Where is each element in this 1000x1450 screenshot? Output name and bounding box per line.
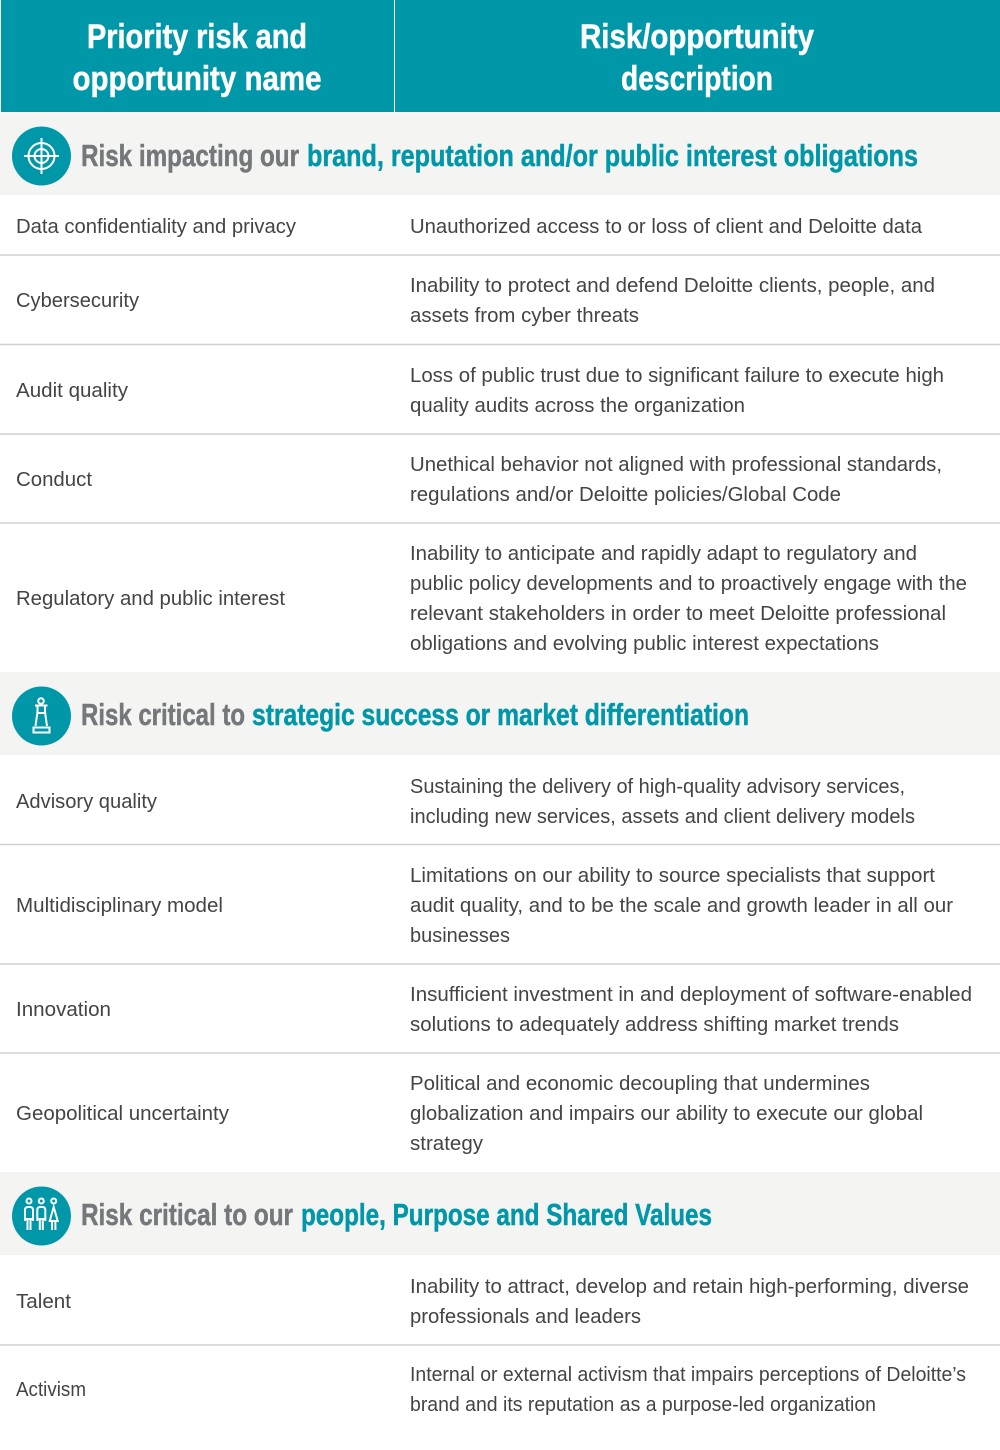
row: cybersecurity: Cybersecurity [16,289,140,312]
icon: three people [12,1186,71,1246]
row: talent: Talent [16,1290,71,1313]
row: cybersecurity [16,274,935,327]
section heading: Risk impacting our [81,138,299,173]
row: talent: professionals and leaders [410,1305,641,1328]
row: regulatory and public interest: Inability to anticipate and rapidly adapt to regulatory and [410,542,917,565]
row: data confidentiality: Data confidentiality and privacy [16,215,297,238]
row: data confidentiality [16,215,923,238]
row: innovation [16,983,972,1036]
section heading: Risk critical to [81,697,245,732]
row: audit quality: Loss of public trust due to significant failure to execute high [410,364,944,387]
row: innovation: Innovation [16,998,111,1021]
row: talent [16,1275,969,1328]
row: conduct: Conduct [16,468,92,491]
row: advisory quality [16,775,915,828]
row: conduct: regulations and/or Deloitte policies/Global Code [410,483,841,506]
section heading: people, Purpose and Shared Values [301,1197,712,1232]
header: risk/opportunity description: Risk/opportunity [580,18,814,56]
row: conduct: Unethical behavior not aligned with professional standards, [410,453,942,476]
row: regulatory and public interest: obligations and evolving public interest expectations [410,632,879,655]
row: geopolitical uncertainty: Political and economic decoupling that undermines [410,1072,870,1095]
table header [1,0,1000,112]
row: geopolitical uncertainty: Geopolitical uncertainty [16,1102,230,1125]
section heading [81,697,749,732]
row: audit quality: Audit quality [16,379,129,402]
row: activism: Activism [16,1378,86,1401]
row: cybersecurity: Inability to protect and defend Deloitte clients, people, and [410,274,935,297]
row: multidisciplinary model: audit quality, and to be the scale and growth leader in all our [410,894,953,917]
row: conduct [16,453,942,506]
section heading [81,1197,712,1232]
row: audit quality: quality audits across the organization [410,394,745,417]
icon: chess piece [12,686,71,746]
row: regulatory and public interest: Regulatory and public interest [16,587,285,610]
row: audit quality [16,364,944,417]
row: innovation: solutions to adequately address shifting market trends [410,1013,899,1036]
row: cybersecurity: assets from cyber threats [410,304,639,327]
section heading: Risk critical to our [81,1197,293,1232]
icon: target [12,126,71,186]
row: regulatory and public interest [16,542,967,655]
header: risk/opportunity description: description [621,60,773,98]
section band: strategic success [0,672,1000,755]
row: activism: brand and its reputation as a purpose-led organization [410,1393,876,1416]
row: regulatory and public interest: public policy developments and to proactively engage with the [410,572,967,595]
row: activism: Internal or external activism that impairs perceptions of Deloitte’s [410,1363,966,1386]
row: geopolitical uncertainty: globalization and impairs our ability to execute our global [410,1102,923,1125]
row: multidisciplinary model: businesses [410,924,510,947]
header: risk/opportunity description [580,18,814,98]
row: data confidentiality: Unauthorized access to or loss of client and Deloitte data [410,215,923,238]
row: multidisciplinary model: Limitations on our ability to source specialists that support [410,864,935,887]
row: multidisciplinary model [16,864,953,947]
row: talent: Inability to attract, develop and retain high-performing, diverse [410,1275,969,1298]
row: advisory quality: including new services, assets and client delivery models [410,805,915,828]
section band: brand and reputation [0,113,1000,195]
header: priority risk and opportunity name [72,18,322,98]
header: priority risk and opportunity name: Priority risk and [87,18,307,56]
row: geopolitical uncertainty: strategy [410,1132,484,1155]
row: regulatory and public interest: relevant stakeholders in order to meet Deloitte professional [410,602,946,625]
row: activism [16,1363,966,1416]
row: advisory quality: Advisory quality [16,790,158,813]
row: advisory quality: Sustaining the delivery of high-quality advisory services, [410,775,905,798]
row: geopolitical uncertainty [16,1072,923,1155]
header: priority risk and opportunity name: opportunity name [72,60,322,98]
row: multidisciplinary model: Multidisciplinary model [16,894,223,917]
row: innovation: Insufficient investment in and deployment of software-enabled [410,983,972,1006]
section heading [81,138,918,173]
section heading: strategic success or market differentiation [252,697,749,732]
section band: people, purpose and values [0,1172,1000,1255]
